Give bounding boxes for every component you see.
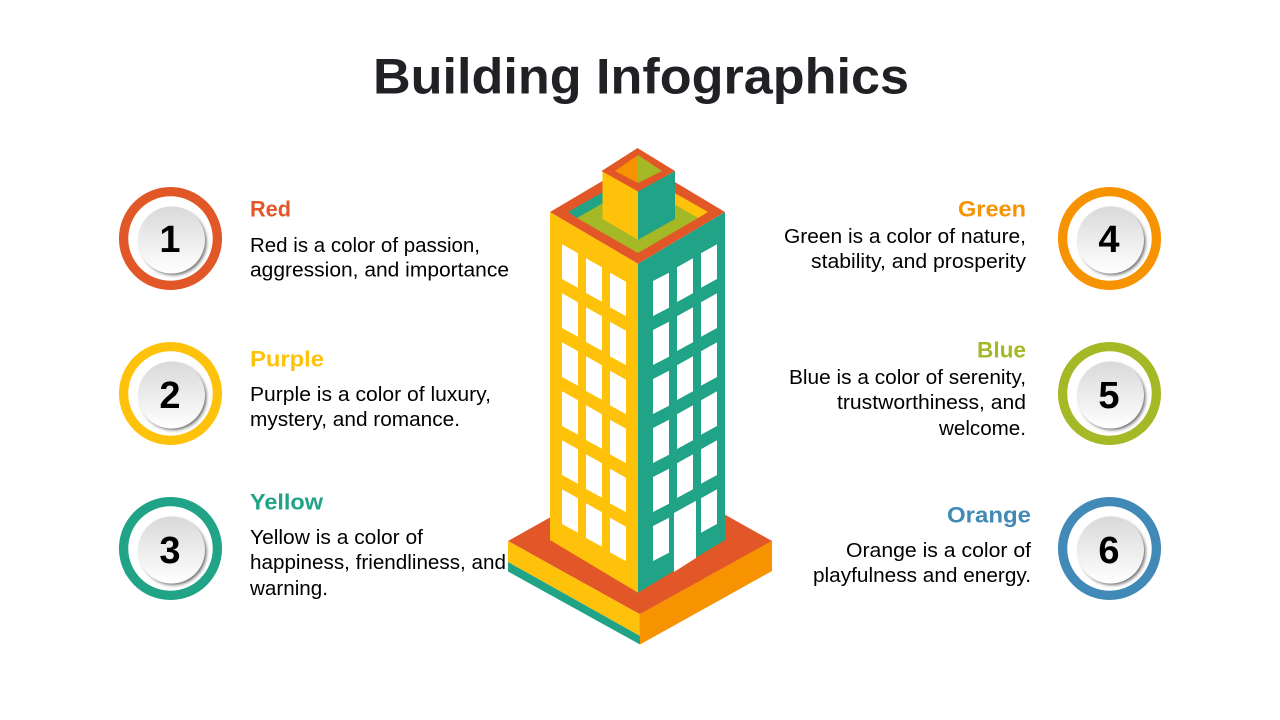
icon: badge 5 [1063,347,1156,440]
icon: badge 2 [124,347,217,440]
item 4: Green [784,192,1156,285]
icon: badge 4 [1063,192,1156,285]
windows: left wall [562,244,626,561]
chimney [602,148,675,240]
heading: Red: Red [250,196,291,222]
icon: badge 1: 1 [159,219,181,261]
text: Yellow description: Yellow is a color of [250,527,423,549]
text: Purple description [250,384,491,431]
icon: badge 3: 3 [159,530,181,572]
text: Purple description: mystery, and romance. [250,409,460,431]
windows: right wall [653,244,717,561]
icon: badge 4: 4 [1098,219,1120,261]
text: Red description [250,235,509,282]
icon: badge 6: 6 [1098,530,1120,572]
text: Green description [784,226,1026,273]
text: Blue description: trustworthiness, and [837,392,1026,414]
item 5: Blue [789,338,1156,440]
icon: badge 6 [1063,502,1156,595]
text: Blue description: Blue is a color of serenity, [789,367,1026,389]
item 3: Yellow [124,490,506,600]
item 2: Purple [124,346,491,440]
text: Red description: Red is a color of passion, [250,235,480,257]
icon: badge 3 [124,502,217,595]
text: Yellow description: warning. [249,578,328,600]
item 6: Orange [813,502,1156,595]
text: Blue description: welcome. [938,418,1026,440]
illustration: isometric building [508,148,772,644]
item 1: Red [124,192,509,285]
heading: Blue: Blue [977,338,1026,362]
icon: badge 5: 5 [1098,375,1120,417]
text: Green description: stability, and prosperity [811,251,1026,273]
roof [550,160,725,264]
heading: Purple: Purple [250,346,324,372]
text: Purple description: Purple is a color of luxury, [250,384,491,406]
text: Yellow description [249,527,506,600]
heading: Orange: Orange [947,502,1031,528]
text: Green description: Green is a color of nature, [784,226,1026,248]
title: Building Infographics [373,48,909,104]
text: Yellow description: happiness, friendliness, and [250,552,506,574]
text: Orange description: Orange is a color of [846,540,1031,562]
icon: badge 1 [124,192,217,285]
heading: Yellow: Yellow [250,490,324,514]
text: Orange description: playfulness and energy. [813,565,1031,587]
text: Red description: aggression, and importance [250,260,509,282]
heading: Green: Green [958,196,1026,222]
building right wall [638,212,725,593]
icon: badge 2: 2 [159,375,181,417]
text: Orange description [813,540,1031,587]
building base platform [508,467,772,644]
text: Blue description [789,367,1026,440]
door [674,501,696,572]
building left wall [550,212,638,593]
